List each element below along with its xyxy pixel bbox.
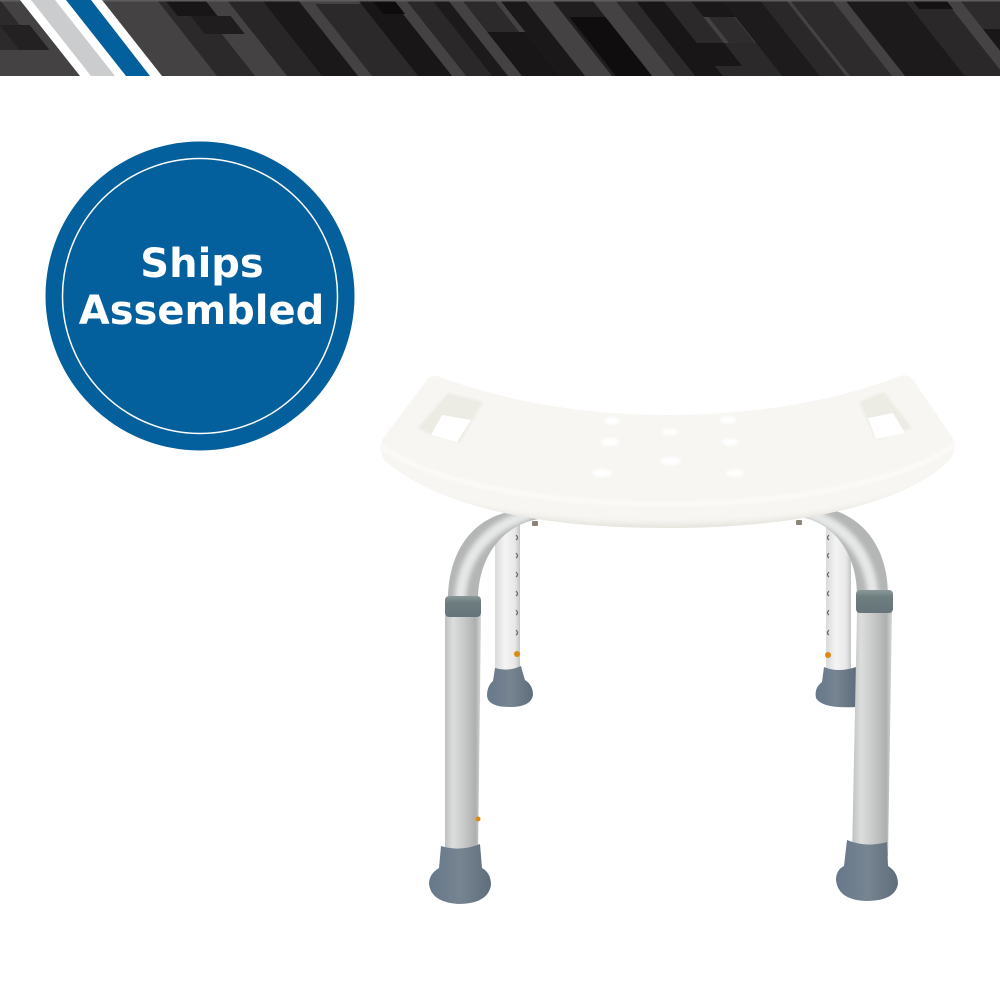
shower bench product illustration bbox=[378, 375, 958, 904]
front right leg bbox=[804, 512, 898, 901]
badge: ships assembled bbox=[46, 142, 354, 450]
back right leg bbox=[816, 525, 856, 707]
drain holes bbox=[592, 416, 744, 477]
front left leg bbox=[429, 510, 548, 904]
mounting bolts bbox=[532, 520, 802, 526]
left handle hole bbox=[418, 393, 483, 442]
seat bbox=[378, 375, 958, 535]
badge: ships assembled: Ships bbox=[140, 241, 264, 287]
back left leg bbox=[487, 525, 533, 707]
top banner edge bbox=[0, 0, 1000, 2]
right handle hole bbox=[859, 392, 912, 440]
badge: ships assembled: Assembled bbox=[79, 288, 324, 334]
header banner bbox=[0, 0, 1000, 76]
seat edge shading bbox=[489, 504, 864, 528]
banner accent stripes bbox=[20, 0, 162, 76]
